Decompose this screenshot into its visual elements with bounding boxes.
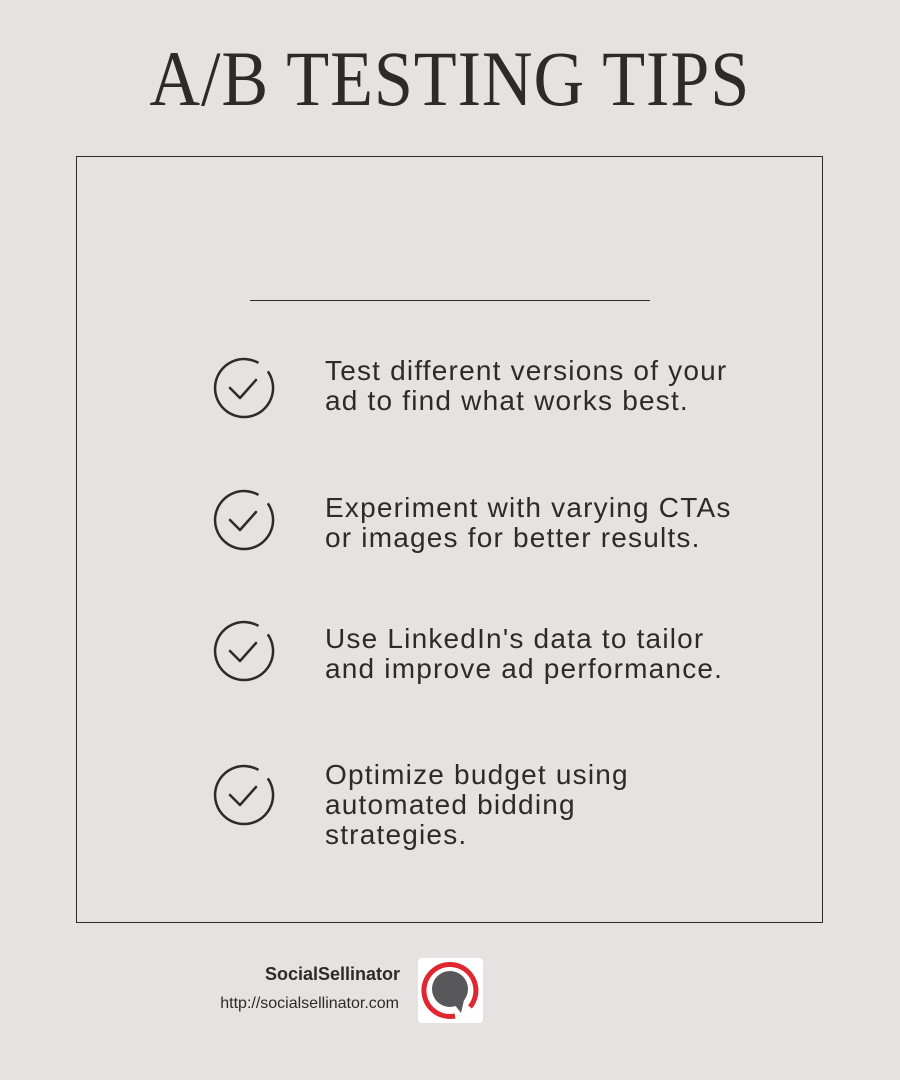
icon: check <box>214 620 274 682</box>
tip 1 <box>214 355 727 418</box>
text: Optimize budget using <box>325 759 629 790</box>
text: ad to find what works best. <box>325 385 689 416</box>
url: http://socialsellinator.com <box>220 995 399 1012</box>
text: strategies. <box>325 819 467 850</box>
text: and improve ad performance. <box>325 653 723 684</box>
text <box>325 355 727 416</box>
text: Experiment with varying CTAs <box>325 492 732 523</box>
icon: logo <box>418 958 483 1023</box>
text <box>325 759 629 850</box>
text: Use LinkedIn's data to tailor <box>325 623 704 654</box>
text <box>325 492 732 553</box>
text <box>325 623 723 684</box>
icon: check <box>214 490 274 550</box>
text: or images for better results. <box>325 522 701 553</box>
panel: tips <box>76 156 823 923</box>
text: automated bidding <box>325 789 576 820</box>
text: Test different versions of your <box>325 355 727 386</box>
icon: check <box>214 764 274 826</box>
icon: check <box>214 358 274 418</box>
title: A/B TESTING TIPS <box>150 35 750 122</box>
tip 3 <box>214 620 723 684</box>
tip 2 <box>214 490 732 553</box>
brand name: SocialSellinator <box>265 964 400 984</box>
tip 4 <box>214 759 629 850</box>
